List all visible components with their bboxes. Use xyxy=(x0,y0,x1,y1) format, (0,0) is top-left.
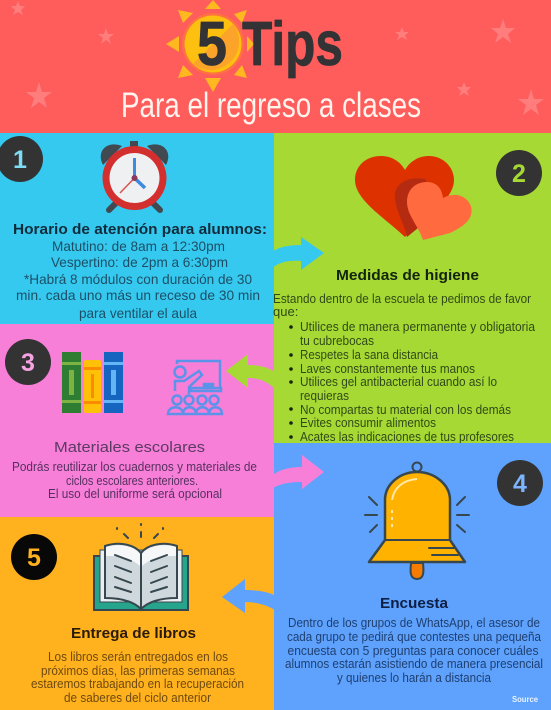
text: encuesta xyxy=(285,615,543,685)
badge: 5: 5 xyxy=(27,544,41,572)
list: higiene: tu cubrebocas xyxy=(300,333,374,348)
panel: horario xyxy=(0,133,274,324)
text: libros: Los libros serán entregados en los xyxy=(48,649,228,664)
arrow: pink to blue xyxy=(270,455,324,490)
heading: horario: Horario de atención para alumnos: xyxy=(13,221,267,238)
panel: materiales xyxy=(0,324,274,517)
title xyxy=(197,10,343,79)
heading: encuesta: Encuesta xyxy=(380,595,449,612)
text: materiales: El uso del uniforme será opcional xyxy=(48,486,222,501)
badge: 5 xyxy=(11,534,57,580)
title: Tips xyxy=(242,10,343,79)
list: higiene: Utilices de manera permanente y obligatoria xyxy=(300,319,536,334)
text: horario: min. cada uno más un receso de 30 min xyxy=(16,287,260,303)
heading: libros: Entrega de libros xyxy=(71,625,196,642)
text: higiene intro xyxy=(273,291,532,319)
arrow: green to pink xyxy=(226,354,278,393)
icon: hearts xyxy=(355,156,472,240)
subtitle: Para el regreso a clases xyxy=(121,86,421,125)
panel: header xyxy=(0,0,551,134)
text: encuesta: encuesta con 5 preguntas para conocer cuáles xyxy=(288,643,539,658)
list: higiene: requieras xyxy=(300,388,349,403)
text: libros: de saberes del ciclo anterior xyxy=(64,690,212,705)
source label: Source xyxy=(512,695,539,704)
panel: higiene xyxy=(273,133,551,444)
badge: 2 xyxy=(496,150,542,196)
list: higiene: Respetes la sana distancia xyxy=(300,347,439,362)
text: libros xyxy=(31,649,244,705)
text: materiales: ciclos escolares anteriores. xyxy=(66,473,198,488)
text: horario: *Habrá 8 módulos con duración de 30 xyxy=(24,271,252,287)
text: higiene intro: Estando dentro de la escuela te pedimos de favor xyxy=(273,291,532,306)
icon: sun xyxy=(166,0,254,92)
icon: bell xyxy=(365,462,469,579)
heading: higiene: Medidas de higiene xyxy=(336,267,479,284)
list: higiene: Utilices gel antibacterial cuando así lo xyxy=(300,374,497,389)
arrow: blue to orange xyxy=(222,579,278,613)
list: higiene: Evites consumir alimentos xyxy=(300,415,436,430)
badge: 4: 4 xyxy=(513,470,527,498)
arrow: blue to green xyxy=(270,237,324,270)
panel: encuesta xyxy=(274,443,551,710)
list: higiene: No compartas tu material con los demás xyxy=(300,402,511,417)
badge: 2: 2 xyxy=(512,160,526,188)
text: libros: próximos días, las primeras semanas xyxy=(41,663,235,678)
icon: open book xyxy=(94,524,188,610)
text: higiene intro: que: xyxy=(273,304,298,319)
title: 5 xyxy=(197,10,227,79)
badge: 4 xyxy=(497,460,543,506)
icon: books xyxy=(62,352,123,413)
badge: 3: 3 xyxy=(21,349,35,377)
list: higiene: Acates las indicaciones de tus profesores xyxy=(300,429,514,444)
list: higiene xyxy=(289,319,536,444)
text: horario: Matutino: de 8am a 12:30pm xyxy=(52,238,225,254)
text: libros: estaremos trabajando en la recuperación xyxy=(31,676,244,691)
text: encuesta: y quienes lo harán a distancia xyxy=(337,670,492,685)
icon: alarm clock xyxy=(101,141,168,210)
badge: 1: 1 xyxy=(13,146,27,174)
text: horario: Vespertino: de 2pm a 6:30pm xyxy=(51,254,228,270)
text: materiales xyxy=(12,459,257,501)
text: horario xyxy=(16,238,260,321)
badge: 3 xyxy=(5,339,51,385)
heading: materiales: Materiales escolares xyxy=(54,439,205,456)
badge: 1 xyxy=(0,136,43,182)
list: higiene: Laves constantemente tus manos xyxy=(300,361,475,376)
text: horario: para ventilar el aula xyxy=(79,305,197,321)
icon: classroom xyxy=(168,361,222,414)
text: materiales: Podrás reutilizar los cuadernos y materiales de xyxy=(12,459,257,474)
stars xyxy=(11,1,544,115)
panel: libros xyxy=(0,517,274,710)
